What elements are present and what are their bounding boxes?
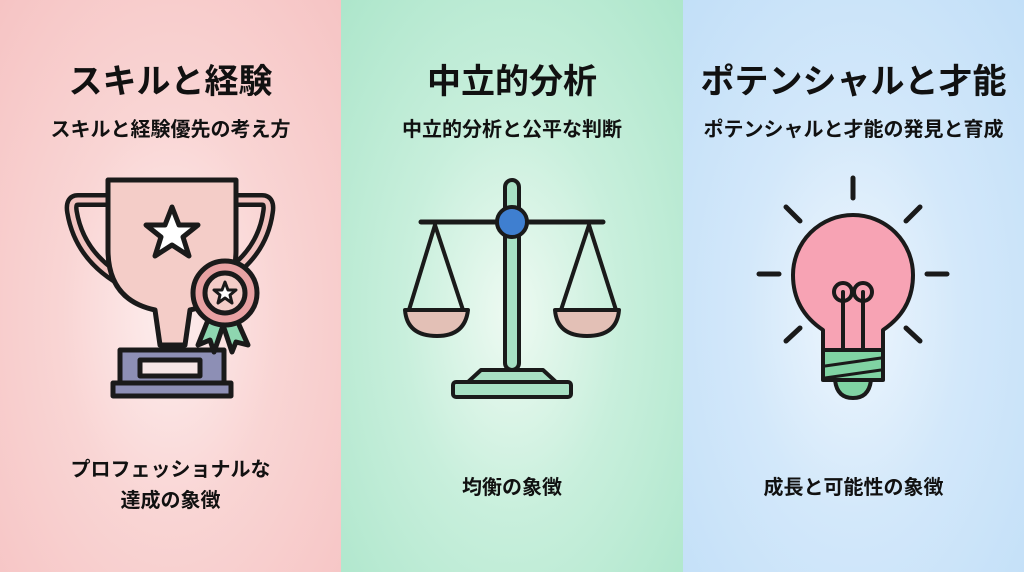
panel: neutral analysis (341, 0, 683, 572)
caption: skills (70, 458, 270, 512)
title: potential: ポテンシャルと才能 (700, 63, 1006, 101)
caption: potential: 成長と可能性の象徴 (764, 477, 944, 499)
icon: scale (403, 178, 621, 399)
subtitle: neutral: 中立的分析と公平な判断 (402, 119, 622, 141)
subtitle: potential: ポテンシャルと才能の発見と育成 (704, 119, 1004, 141)
icon: trophy (64, 178, 276, 398)
title: neutral: 中立的分析 (427, 63, 597, 101)
title: skills: スキルと経験 (68, 63, 272, 101)
icon: light bulb (756, 176, 950, 400)
caption: skills: 達成の象徴 (120, 490, 220, 512)
panel: potential (683, 0, 1024, 572)
subtitle: skills: スキルと経験優先の考え方 (50, 119, 290, 141)
panel: skills (0, 0, 341, 572)
caption: neutral: 均衡の象徴 (462, 477, 562, 499)
caption: skills: プロフェッショナルな (70, 459, 270, 481)
